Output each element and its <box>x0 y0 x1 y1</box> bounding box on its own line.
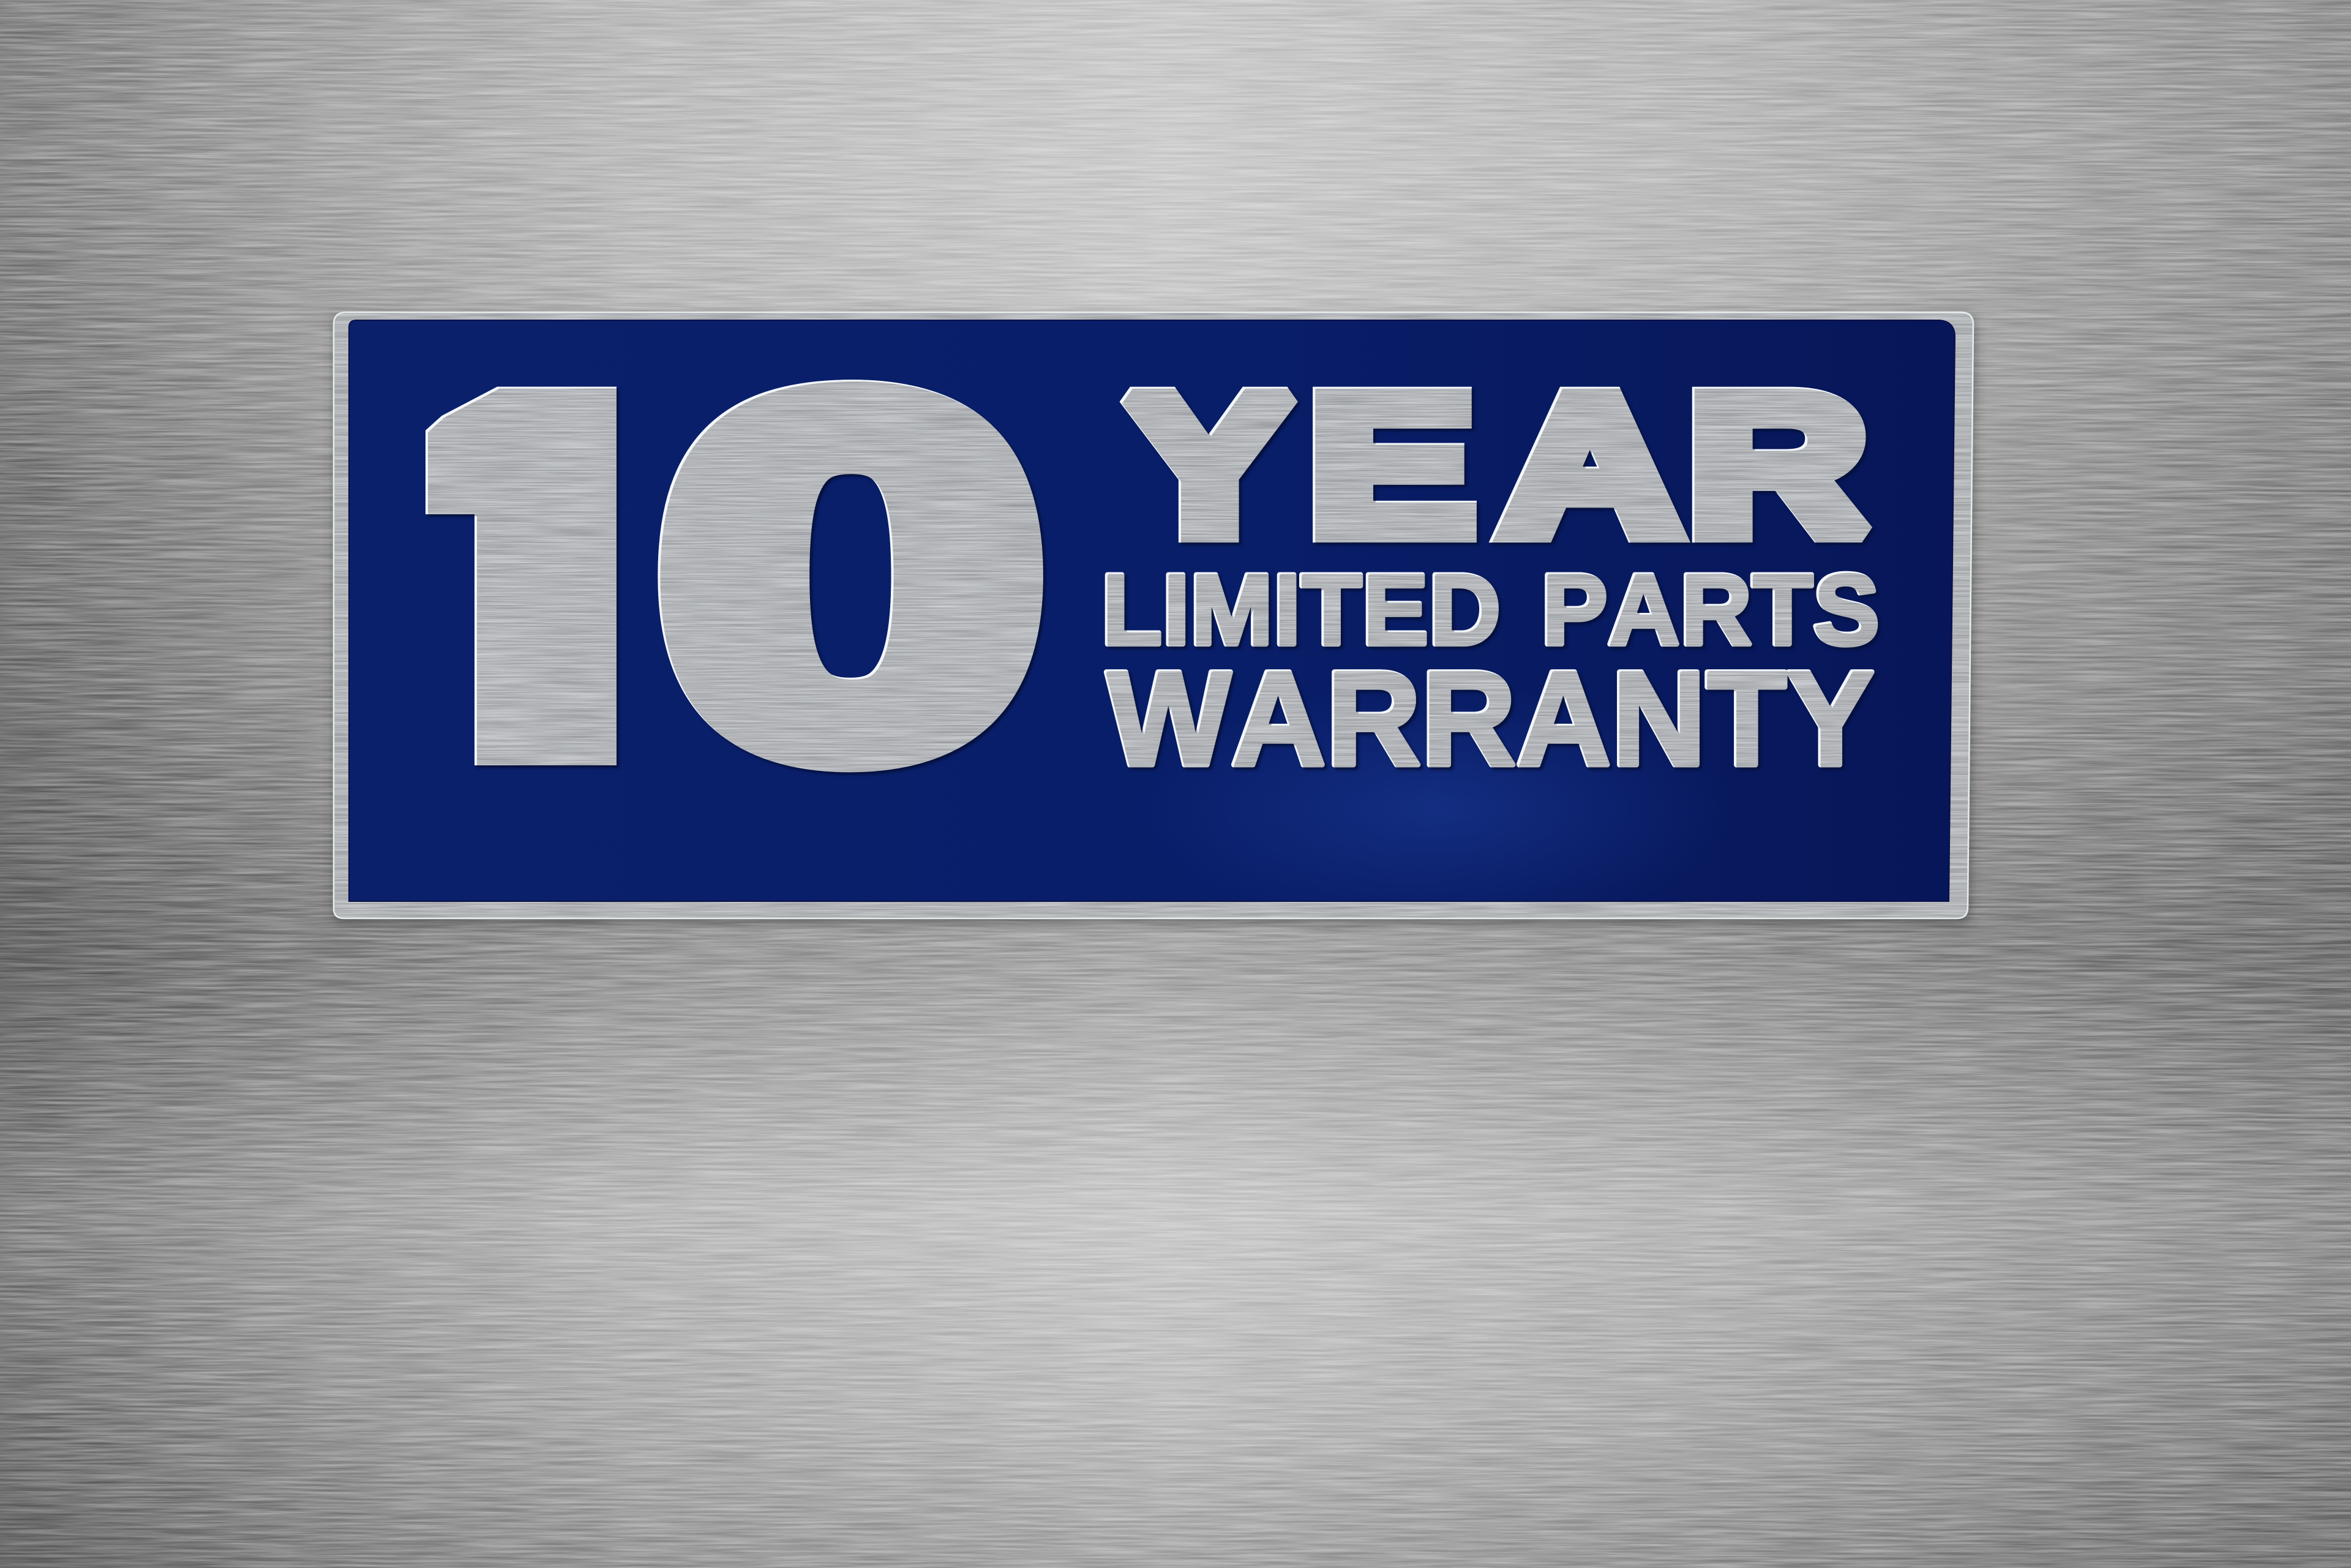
plate shadow <box>334 315 1975 923</box>
warranty badge plate <box>334 312 1975 923</box>
numeral 1: 1 <box>360 307 700 860</box>
words LIMITED PARTS: LIMITED PARTS <box>1101 553 1880 666</box>
word YEAR: YEAR <box>1126 353 1867 575</box>
plate frame edge highlight <box>334 312 1973 918</box>
plate metal frame <box>334 312 1973 918</box>
embossed badge lettering <box>426 380 1881 776</box>
numeral 0: 0 <box>659 298 1043 853</box>
blue panel light glow <box>349 320 1955 901</box>
blue enamel panel <box>349 320 1955 901</box>
word WARRANTY: WARRANTY <box>1106 643 1874 794</box>
